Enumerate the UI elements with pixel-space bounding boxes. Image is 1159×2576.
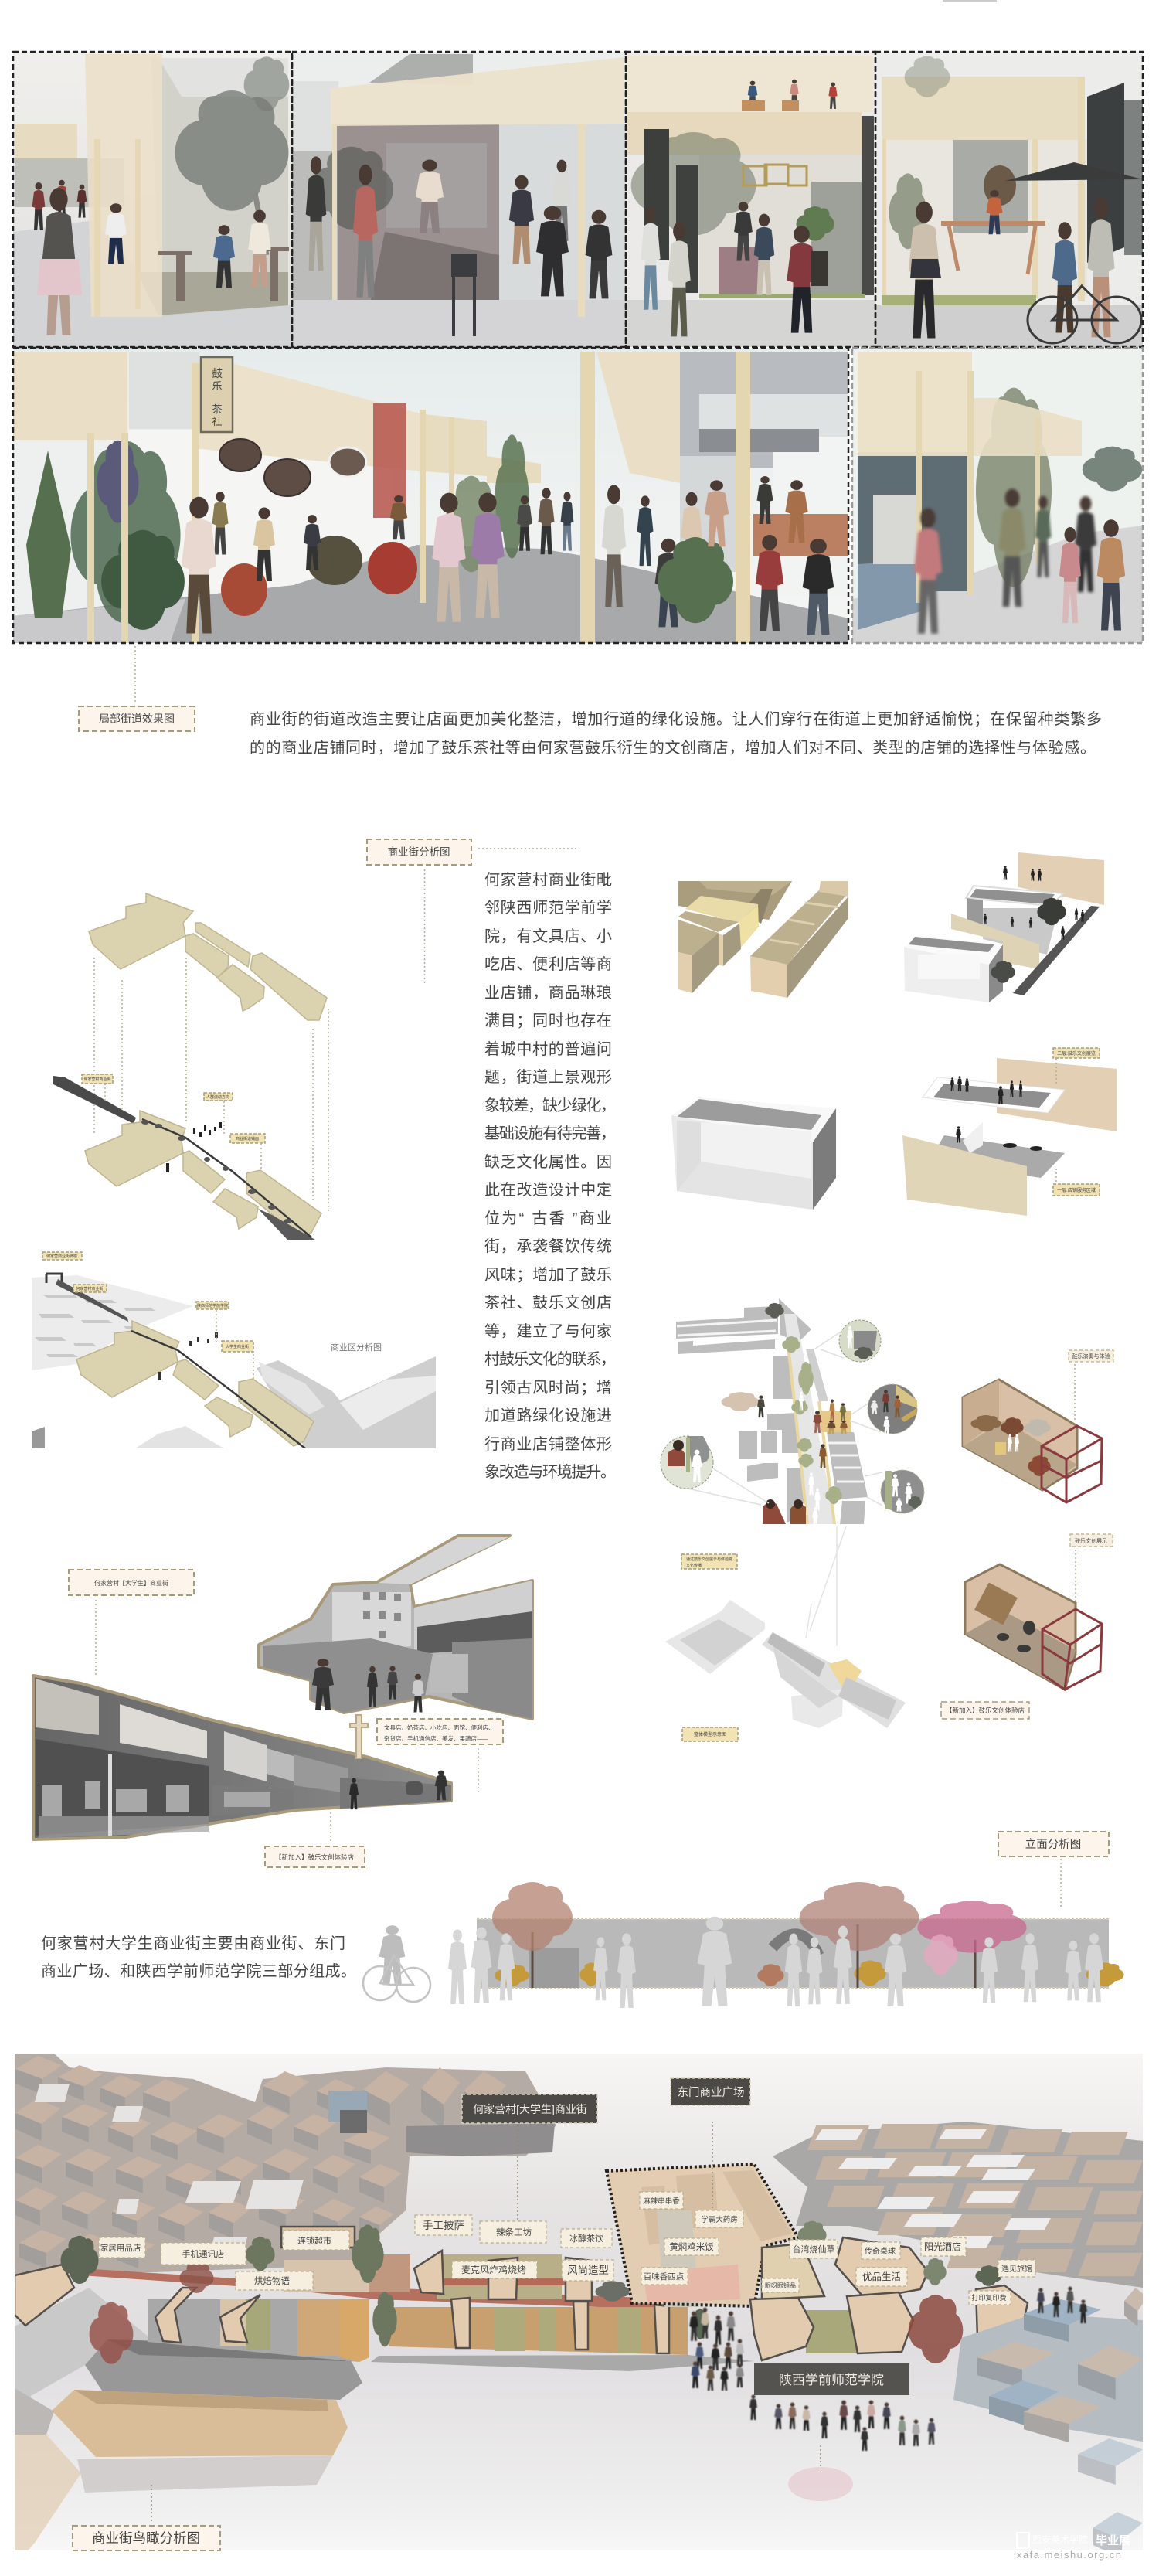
text block: street analysis narrative: 题，街道上景观形: [484, 1068, 612, 1086]
tags: commercial district labels: 大学生商业街: [226, 1344, 249, 1349]
text block: street analysis narrative: 象改造与环境提升。: [484, 1463, 616, 1481]
labels: dark section headings: 何家营村[大学生]商业街: [473, 2103, 587, 2115]
tag: student street: [69, 1570, 194, 1595]
labels: shop names: 风尚造型: [567, 2265, 609, 2276]
tag: newly added shop: 【新加入】鼓乐文创体验店: [275, 1853, 354, 1861]
detail circle: portrait: [661, 1436, 713, 1489]
tag: shop types: [377, 1719, 503, 1744]
tag: new shop: [941, 1702, 1029, 1719]
text block: street analysis narrative: 茶社、鼓乐文创店: [484, 1294, 612, 1312]
diagram: exploded axonometric, roof layer: [89, 893, 327, 1020]
pink location marker: [788, 2467, 853, 2501]
shop sign: 鼓乐茶社: 乐: [212, 380, 223, 392]
watermark: [1017, 2533, 1130, 2548]
tags: commercial district labels: 陕西师范学前学院: [197, 1303, 228, 1308]
diagram: shop section with beige wall: [904, 852, 1104, 1002]
chart: street elevation: [363, 1882, 1123, 2008]
blue dorm buildings: [953, 2288, 1147, 2558]
labels: shop names: 台湾烧仙草: [793, 2244, 834, 2254]
text block: street analysis narrative: 缺乏文化属性。因: [484, 1153, 612, 1171]
tags: street layer labels: 何家营村商业街: [83, 1077, 111, 1082]
tags: commercial district labels: 何家营村商业街: [76, 1286, 104, 1291]
detail circle: pedestrians: [881, 1470, 924, 1513]
text block: street analysis narrative: 吃店、便利店等商: [484, 955, 612, 973]
tags: yellow map labels: 文化传播: [686, 1563, 702, 1568]
text block: street analysis narrative: 加道路绿化设施进: [484, 1407, 612, 1424]
tag: new shop: 【新加入】鼓乐文创体验店: [946, 1707, 1025, 1714]
tag: drum performance: 鼓乐演奏与体验: [1072, 1353, 1110, 1359]
tag: bird's-eye analysis: [73, 2526, 220, 2550]
tag: local street effect: 局部街道效果图: [99, 713, 175, 725]
text block: street analysis narrative: 何家营村商业街毗: [484, 871, 612, 889]
shop sign: 鼓乐茶社: 社: [212, 416, 223, 427]
labels: shop names: 冰醇茶饮: [569, 2233, 603, 2244]
tag: bird's-eye analysis: 商业街鸟瞰分析图: [92, 2530, 200, 2546]
labels: shop names: 手工披萨: [423, 2220, 464, 2231]
tag: drum performance: [1069, 1350, 1113, 1362]
tags: commercial district labels: [42, 1252, 253, 1352]
labels: shop names: 传奇桌球: [865, 2246, 896, 2256]
tags: commercial district labels: 何家营商业街牌楼: [46, 1254, 77, 1259]
panel: street view 3, rooftop seating and plants: [626, 52, 875, 347]
tags: street layer labels: 人群流动方向: [206, 1094, 229, 1100]
shop sign: 鼓乐茶社: 茶: [212, 403, 223, 415]
text block: street analysis narrative: 基础设施有待完善，: [484, 1125, 616, 1142]
labels: shop names: 烘焙物语: [254, 2275, 290, 2286]
tags: floor labels: [1053, 1048, 1100, 1196]
diagram: exploded axonometric, street layer: [53, 1076, 321, 1240]
diagram: two-floor layout: [902, 1058, 1117, 1216]
labels: shop names: 手机通讯店: [182, 2248, 224, 2259]
right shops: [750, 2237, 1028, 2360]
labels: shop names: [99, 2192, 1035, 2305]
panel: street view 6, blurred pedestrians: [852, 348, 1143, 643]
photo: existing street, lower left: [33, 1676, 451, 1839]
tag: local street effect: [79, 706, 195, 731]
labels: shop names: 百味香西点: [644, 2272, 684, 2282]
detail circle: performers: [868, 1384, 917, 1435]
tags: street layer labels: [82, 1074, 265, 1143]
tag: cultural display: 鼓乐文创展示: [1075, 1537, 1107, 1544]
text block: street analysis narrative: 街，承袭餐饮传统: [484, 1237, 612, 1255]
photo frames: dashed borders: [13, 52, 1143, 643]
panel: street view 5, drum tea house: [13, 348, 848, 643]
text block: street composition: [41, 1935, 356, 1980]
watermark: 西安美术学院: [1032, 2533, 1088, 2545]
diagram: node map with detail circles: [661, 1298, 924, 1526]
labels: shop names: 遇见旅馆: [1001, 2264, 1032, 2274]
diagram: performance interior box: [963, 1364, 1102, 1502]
text block: street intro: 商业街的街道改造主要让店面更加美化整洁，增加行道的绿化设施。让人们穿行在街道上更加舒适愉悦；在保留种类繁多: [250, 710, 1102, 728]
tag: shop types: 杂货店、手机通信店、美发、果蔬店——: [384, 1734, 488, 1742]
label: commercial district analysis: 商业区分析图: [331, 1342, 382, 1353]
tag: shop types: 文具店、奶茶店、小吃店、面馆、便利店、: [384, 1724, 495, 1731]
detail circle: stairs: [839, 1320, 881, 1362]
tag: student street: 何家营村【大学生】商业街: [94, 1579, 168, 1587]
diagram: retail interior box: [965, 1550, 1102, 1690]
plants: shrubs: [495, 1960, 1123, 1986]
watermark: 毕业展: [1096, 2534, 1130, 2547]
labels: dark section headings: 陕西学前师范学院: [779, 2373, 884, 2387]
labels: shop names: 连锁超市: [297, 2235, 331, 2246]
diagram: commercial district analysis: [32, 1274, 436, 1448]
text block: street analysis narrative: 邻陕西师范学前学: [484, 899, 612, 917]
labels: shop names: 麦克风炸鸡烧烤: [461, 2264, 526, 2275]
labels: shop names: 学霸大药房: [701, 2215, 738, 2224]
text block: street analysis narrative: [484, 871, 616, 1481]
tags: floor labels: 一层:店铺服务区域: [1057, 1187, 1096, 1193]
colour bands along street: [148, 2254, 688, 2362]
text block: street analysis narrative: 着城中村的普遍问: [484, 1040, 612, 1058]
tag: elevation analysis: 立面分析图: [1025, 1838, 1081, 1851]
text block: street analysis narrative: 业店铺，商品琳琅: [484, 984, 612, 1002]
pedestrian silhouettes: [448, 1917, 1103, 2008]
diagram: tan massing blocks: [678, 881, 848, 998]
photo: existing street, upper right: [259, 1536, 532, 1719]
labels: shop names: 眼呀眼镜品: [765, 2282, 796, 2289]
tag: elevation analysis: [998, 1832, 1109, 1856]
outlined shop fronts: [15, 2227, 669, 2353]
panel: bird's-eye analysis of the commercial street: [15, 2054, 1147, 2566]
text block: street analysis narrative: 引领古风时尚；增: [484, 1379, 612, 1397]
tag: newly added shop: [265, 1846, 365, 1867]
pink walkway: [89, 2269, 664, 2307]
labels: shop names: 阳光酒店: [924, 2241, 961, 2252]
text block: street analysis narrative: 象较差，缺少绿化，: [484, 1097, 616, 1114]
trees: [492, 1882, 1027, 1988]
labels: shop names: 黄焖鸡米饭: [669, 2241, 714, 2252]
text block: street intro: [250, 710, 1102, 757]
text block: street composition: 商业广场、和陕西学前师范学院三部分组成。: [41, 1962, 356, 1980]
text block: street intro: 的的商业店铺同时，增加了鼓乐茶社等由何家营鼓乐衍生的文创商店，增加人们对不同、类型的店铺的选择性与体验感。: [250, 739, 1096, 757]
tag: cultural display: [1070, 1534, 1113, 1547]
arch post on photo: [350, 1715, 368, 1758]
text block: street analysis narrative: 村鼓乐文化的联系，: [484, 1350, 616, 1368]
shop sign: 鼓乐茶社: 鼓: [212, 367, 223, 379]
shop sign: 鼓乐茶社: [201, 357, 233, 432]
text block: street analysis narrative: 此在改造设计中定: [484, 1181, 612, 1199]
crowds: [689, 2287, 1087, 2451]
labels: shop names: 辣条工坊: [496, 2227, 532, 2237]
labels: shop names: 家居用品店: [100, 2243, 141, 2253]
labels: dark section headings: [462, 2078, 909, 2395]
text block: street analysis narrative: 院，有文具店、小: [484, 927, 612, 945]
text block: street analysis narrative: 行商业店铺整体形: [484, 1435, 612, 1453]
panel: street view 4, cafe with bicycle: [875, 52, 1143, 347]
labels: shop names: 优品生活: [862, 2271, 901, 2282]
east gate plaza: [607, 2164, 798, 2307]
panel: street view 2, shop counter: [292, 52, 626, 347]
panel: street view 1, outdoor seating with tree: [13, 52, 292, 347]
tags: yellow map labels: 通过鼓乐文创展示与体验将: [686, 1557, 732, 1562]
left village buildings: [15, 2054, 556, 2280]
street trees: [60, 2221, 1002, 2364]
text block: street analysis narrative: 满目；同时也存在: [484, 1012, 612, 1029]
tag: commercial street analysis: 商业街分析图: [388, 846, 450, 858]
labels: dark section headings: 东门商业广场: [677, 2086, 745, 2099]
labels: shop names: 打印复印费: [971, 2293, 1007, 2302]
diagram: white massing with new shop: [665, 1526, 906, 1728]
tags: yellow map labels: [681, 1554, 738, 1741]
labels: shop names: 麻辣串串香: [643, 2197, 680, 2206]
tags: yellow map labels: 整体模型示意图: [694, 1731, 726, 1737]
right dorm buildings: [773, 2122, 1143, 2288]
tag: commercial street analysis: [367, 839, 471, 865]
lower left blocks: [15, 2288, 754, 2566]
watermark url: xafa.meishu.org.cn: [1017, 2549, 1121, 2561]
text block: street analysis narrative: 等，建立了与何家: [484, 1322, 612, 1340]
text block: street composition: 何家营村大学生商业街主要由商业街、东门: [41, 1935, 345, 1952]
tags: floor labels: 二层:鼓乐文创展览: [1057, 1050, 1096, 1057]
text block: street analysis narrative: 位为“ 古香 ”商业: [484, 1210, 612, 1227]
diagram: white shop shell: [671, 1097, 836, 1210]
tags: street layer labels: 商业街道铺面: [236, 1136, 259, 1142]
cyclist: [363, 1925, 430, 2002]
text block: street analysis narrative: 风味；增加了鼓乐: [484, 1266, 612, 1284]
